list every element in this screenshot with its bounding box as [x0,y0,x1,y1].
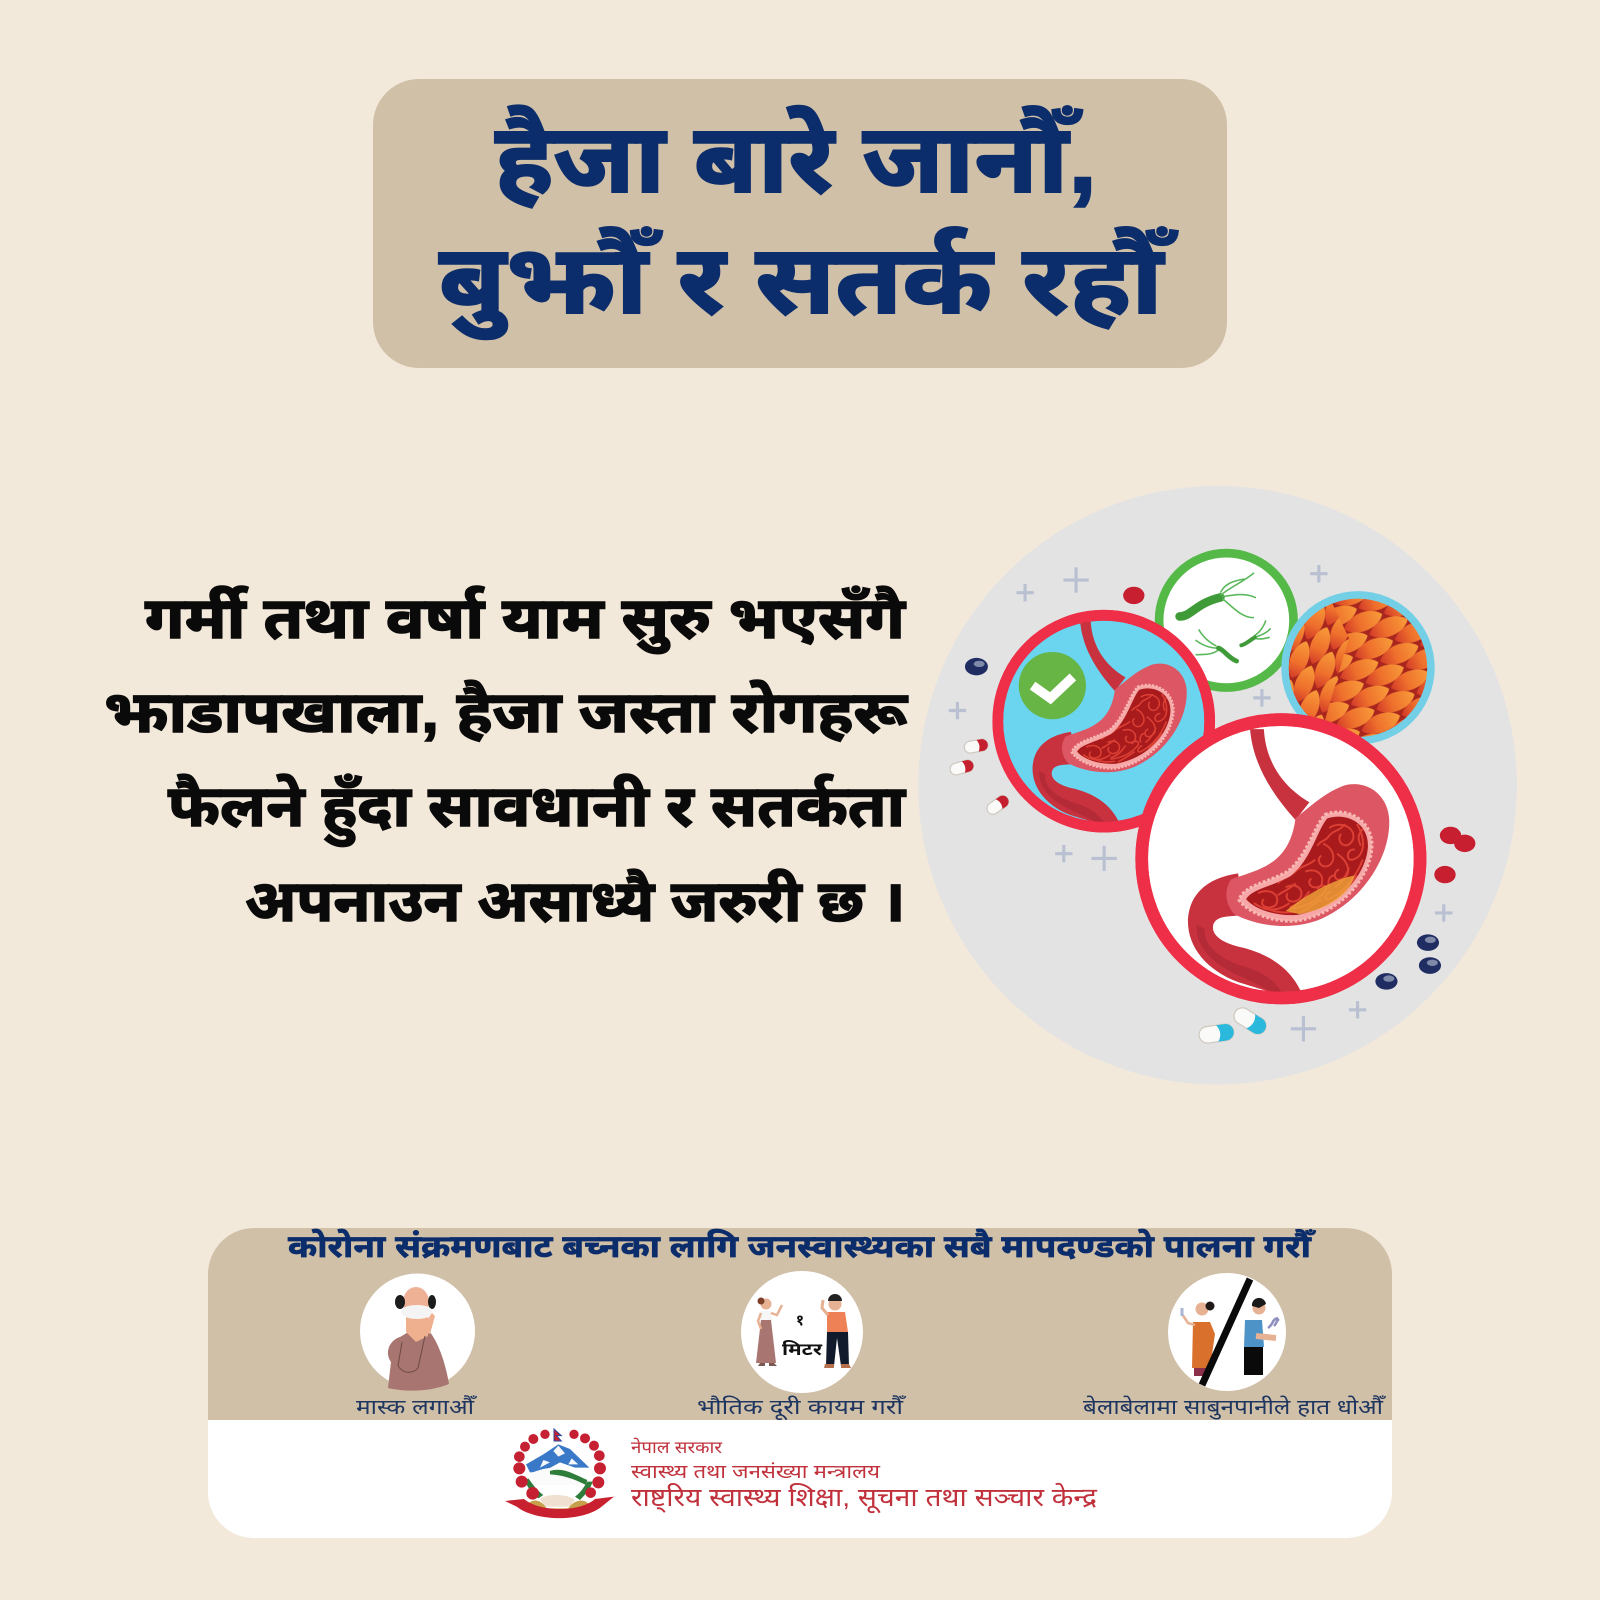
body paragraph: फैलने हुँदा सावधानी र सतर्कता [168,773,906,847]
title text: बुझौँ र सतर्क रहौँ [439,226,1179,340]
icon: wash hands [1168,1273,1286,1391]
infected stomach circle [1142,720,1420,998]
action labels: भौतिक दूरी कायम गरौँ [697,1395,907,1421]
government text: स्वास्थ्य तथा जनसंख्या मन्त्रालय [631,1462,881,1483]
government text: राष्ट्रिय स्वास्थ्य शिक्षा, सूचना तथा सञ्चार केन्द्र [631,1482,1098,1513]
icon: blue capsules [1198,1005,1269,1044]
title text: हैजा बारे जानौँ, [495,105,1097,213]
healthy stomach circle [998,615,1210,827]
government text: नेपाल सरकार [631,1436,723,1457]
icon: red pills [1123,587,1475,883]
icon: red capsules [949,738,1011,817]
icon: physical distance [741,1271,863,1393]
body paragraph [104,585,908,934]
body paragraph: अपनाउन असाध्यै जरुरी छ । [245,868,905,934]
action labels: बेलाबेलामा साबुनपानीले हात धोऔँ [1083,1395,1386,1420]
icon: physical distance: मिटर [782,1339,823,1359]
bottom banner [208,1228,1392,1538]
icon: physical distance: १ [796,1312,804,1329]
body paragraph: गर्मी तथा वर्षा याम सुरु भएसँगै [145,585,906,654]
icon: person wearing mask [360,1274,475,1391]
icon: green check [1019,652,1086,719]
action labels [356,1395,1386,1421]
government text [631,1436,1098,1513]
icon: navy pills [965,658,1441,990]
icon: plus signs [949,565,1452,1041]
title text [439,105,1179,340]
illustration: stomach infection circle [918,486,1517,1085]
banner heading: कोरोना संक्रमणबाट बच्नका लागि जनस्वास्थ्यका सबै मापदण्डको पालना गरौँ [288,1229,1317,1264]
title panel [373,79,1227,368]
body paragraph: झाडापखाला, हैजा जस्ता रोगहरू [104,679,908,745]
icon: Nepal government emblem [505,1429,614,1518]
bacteria circle [1159,553,1294,688]
tissue close-up circle [1281,591,1435,745]
action labels: मास्क लगाऔँ [356,1395,477,1419]
